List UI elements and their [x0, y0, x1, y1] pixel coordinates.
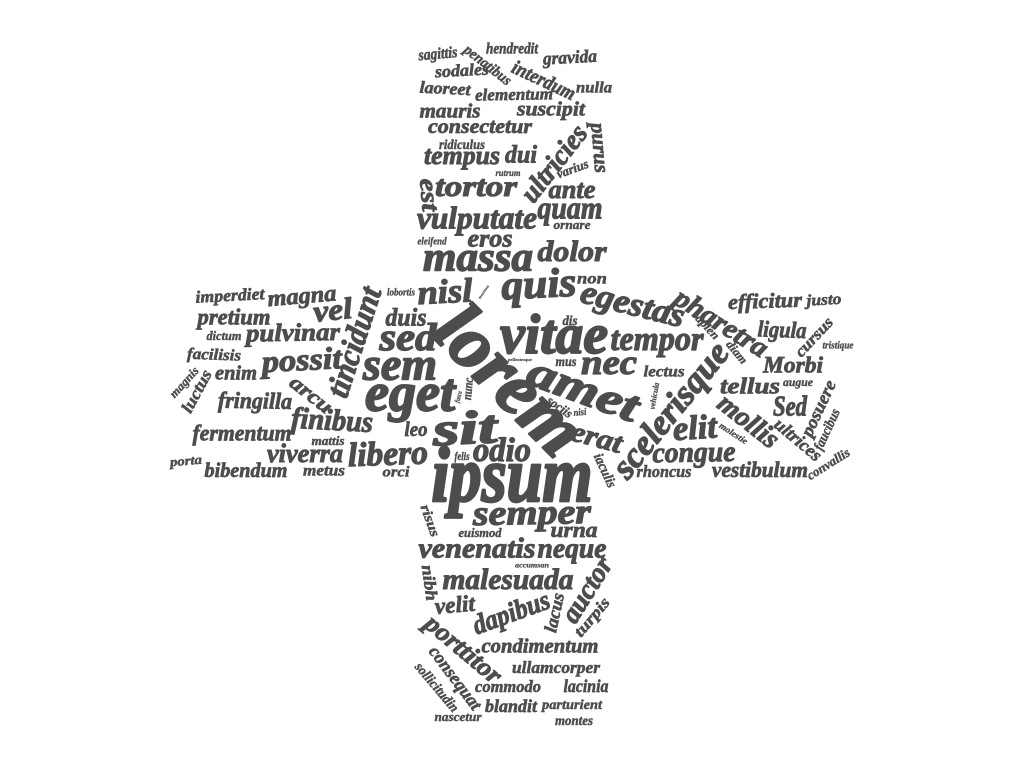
- panel: right arm of the cross: mollis: [711, 388, 785, 455]
- panel: right arm of the cross: augue: [783, 375, 814, 389]
- word: ipsum: ipsum: [432, 431, 592, 518]
- panel: top arm of the cross: gravida: [541, 46, 597, 69]
- panel: top arm of the cross: varius: [554, 156, 591, 181]
- panel: top arm of the cross: interdum: [508, 56, 579, 105]
- panel: bottom arm of the cross: blandit: [485, 696, 538, 716]
- panel: top arm of the cross: quam: [538, 189, 602, 225]
- panel: left arm of the cross: tincidunt: [319, 281, 389, 402]
- panel: left arm of the cross: magnis: [166, 363, 202, 401]
- panel: centre of the cross: non: [577, 271, 607, 288]
- word: amet: amet: [521, 345, 648, 432]
- panel: right arm of the cross: efficitur: [728, 287, 803, 314]
- panel: top arm of the cross: elementum: [475, 84, 553, 105]
- panel: right arm of the cross: egestas: [577, 274, 689, 335]
- panel: bottom arm of the cross: lacinia: [564, 676, 608, 696]
- panel: left arm of the cross: imperdiet: [195, 284, 266, 307]
- panel: right arm of the cross: vehicula: [648, 382, 661, 410]
- panel: left arm of the cross: dictum: [206, 328, 242, 343]
- panel: right arm of the cross: [577, 274, 854, 487]
- panel: right arm of the cross: diam: [723, 338, 751, 367]
- panel: right arm of the cross: tellus: [720, 373, 780, 398]
- panel: centre of the cross: erat: [567, 416, 627, 460]
- panel: bottom arm of the cross: lacus: [540, 591, 568, 634]
- panel: right arm of the cross: posuere: [796, 377, 840, 441]
- word: sit: sit: [430, 401, 501, 457]
- panel: right arm of the cross: ultrices: [770, 414, 826, 465]
- panel: bottom arm of the cross: commodo: [475, 677, 541, 696]
- panel: left arm of the cross: arcu: [285, 370, 338, 419]
- panel: bottom arm of the cross: consequat: [425, 642, 487, 715]
- panel: top arm of the cross: [414, 41, 614, 279]
- panel: right arm of the cross: justo: [803, 291, 842, 310]
- panel: centre of the cross: sed: [378, 316, 437, 359]
- word: massa: massa: [423, 233, 533, 279]
- panel: left arm of the cross: pretium: [196, 304, 271, 329]
- panel: right arm of the cross: ligula: [757, 316, 807, 343]
- panel: right arm of the cross: cursus: [792, 314, 837, 361]
- panel: top arm of the cross: rutrum: [496, 168, 520, 178]
- panel: left arm of the cross: pulvinar: [244, 319, 340, 348]
- panel: top arm of the cross: dui: [505, 142, 537, 169]
- panel: top arm of the cross: eros: [468, 226, 512, 253]
- panel: bottom arm of the cross: parturient: [541, 698, 603, 713]
- panel: centre of the cross: libero: [347, 434, 429, 474]
- panel: bottom arm of the cross: porttitor: [417, 607, 509, 690]
- panel: right arm of the cross: rhoncus: [636, 462, 692, 481]
- panel: left arm of the cross: [166, 280, 389, 482]
- panel: bottom arm of the cross: malesuada: [442, 563, 574, 596]
- panel: bottom arm of the cross: neque: [538, 533, 607, 565]
- panel: centre of the cross: orci: [382, 464, 410, 480]
- panel: left arm of the cross: fringilla: [218, 388, 292, 414]
- panel: bottom arm of the cross: nascetur: [435, 709, 482, 724]
- panel: centre of the cross: odio: [473, 432, 531, 469]
- panel: left arm of the cross: finibus: [290, 402, 374, 439]
- panel: right arm of the cross: vestibulum: [712, 457, 808, 482]
- panel: top arm of the cross: eleifend: [418, 236, 447, 247]
- panel: bottom arm of the cross: montes: [555, 714, 594, 729]
- panel: right arm of the cross: sapien: [688, 307, 723, 343]
- panel: bottom arm of the cross: turpis: [571, 594, 614, 641]
- panel: left arm of the cross: facilisis: [187, 346, 241, 365]
- panel: right arm of the cross: convallis: [804, 445, 853, 483]
- panel: bottom arm of the cross: accumsan: [515, 562, 549, 570]
- panel: top arm of the cross: tortor: [435, 170, 517, 203]
- panel: top arm of the cross: suscipit: [516, 99, 587, 121]
- panel: left arm of the cross: bibendum: [204, 458, 288, 482]
- panel: top arm of the cross: sodales: [433, 59, 490, 81]
- panel: left arm of the cross: enim: [215, 363, 257, 385]
- panel: bottom arm of the cross: sollicitudin: [411, 659, 461, 716]
- panel: centre of the cross: leo: [404, 417, 428, 441]
- panel: centre of the cross: mus: [556, 355, 577, 370]
- panel: top arm of the cross: vulputate: [417, 199, 537, 235]
- word: vitae: vitae: [500, 304, 608, 366]
- panel: right arm of the cross: Morbi: [762, 352, 824, 377]
- panel: centre of the cross: nisl: [416, 272, 474, 312]
- panel: top arm of the cross: nulla: [576, 80, 612, 97]
- panel: centre of the cross: nec: [581, 343, 638, 382]
- panel: left arm of the cross: viverra: [267, 439, 343, 468]
- panel: bottom arm of the cross: auctor: [555, 550, 620, 629]
- panel: centre of the cross: maximus: [477, 283, 490, 300]
- panel: top arm of the cross: est: [414, 177, 444, 214]
- word: quis: quis: [500, 258, 577, 308]
- panel: right arm of the cross: pharetra: [667, 281, 774, 364]
- panel: left arm of the cross: metus: [303, 463, 345, 480]
- panel: centre of the cross: lobortis: [387, 287, 415, 298]
- panel: centre of the cross: felis: [454, 449, 470, 463]
- panel: centre of the cross: nunc: [459, 377, 476, 400]
- panel: bottom arm of the cross: condimentum: [481, 636, 599, 658]
- panel: centre of the cross: sociis: [543, 392, 576, 421]
- panel: top arm of the cross: mauris: [420, 101, 481, 123]
- panel: centre of the cross: pellentesque: [507, 357, 532, 362]
- panel: top arm of the cross: sagittis: [417, 44, 458, 64]
- panel: left arm of the cross: luctus: [177, 366, 216, 416]
- panel: right arm of the cross: tristique: [822, 340, 854, 351]
- word: scelerisque: scelerisque: [603, 334, 737, 487]
- panel: top arm of the cross: tempus: [424, 141, 500, 170]
- panel: bottom arm of the cross: nibh: [418, 564, 441, 602]
- panel: centre of the cross: duis: [386, 305, 426, 332]
- panel: centre of the cross: iaculis: [590, 451, 619, 491]
- panel: top arm of the cross: ridiculus: [439, 138, 485, 153]
- panel: right arm of the cross: Sed: [773, 391, 808, 422]
- panel: right arm of the cross: lectus: [644, 364, 684, 381]
- panel: centre of the cross: nisi: [573, 407, 587, 419]
- panel: top arm of the cross: ornare: [554, 217, 591, 232]
- panel: left arm of the cross: possit: [258, 340, 344, 379]
- panel: top arm of the cross: ultricies: [514, 119, 594, 209]
- panel: top arm of the cross: dolor: [538, 235, 607, 268]
- panel: bottom arm of the cross: [411, 492, 620, 729]
- panel: bottom arm of the cross: venenatis: [419, 533, 535, 565]
- panel: centre of the cross: dis: [562, 314, 578, 329]
- panel: bottom arm of the cross: urna: [550, 517, 598, 542]
- panel: left arm of the cross: fermentum: [192, 420, 292, 445]
- panel: bottom arm of the cross: dapibus: [468, 585, 554, 641]
- panel: top arm of the cross: ante: [549, 175, 595, 204]
- panel: top arm of the cross: laoreet: [419, 78, 472, 99]
- panel: top arm of the cross: purus: [586, 120, 614, 174]
- panel: right arm of the cross: elit: [672, 408, 720, 448]
- panel: bottom arm of the cross: semper: [471, 492, 592, 533]
- panel: left arm of the cross: mattis: [312, 433, 344, 448]
- panel: bottom arm of the cross: euismod: [458, 525, 502, 540]
- panel: left arm of the cross: porta: [168, 452, 203, 469]
- panel: right arm of the cross: faucibus: [812, 406, 844, 453]
- panel: top arm of the cross: penatibus: [459, 41, 514, 89]
- panel: right arm of the cross: molestie: [717, 420, 750, 446]
- word: lorem: lorem: [418, 287, 603, 472]
- panel: top arm of the cross: hendredit: [486, 41, 538, 58]
- panel: bottom arm of the cross: velit: [434, 591, 476, 619]
- panel: centre of the cross: fusce: [453, 390, 464, 404]
- panel: bottom arm of the cross: risus: [417, 503, 442, 540]
- word: eget: eget: [365, 362, 457, 422]
- panel: right arm of the cross: congue: [652, 436, 736, 469]
- panel: centre of the cross: [347, 258, 648, 518]
- panel: left arm of the cross: vel: [312, 292, 355, 329]
- panel: right arm of the cross: tempor: [610, 321, 704, 358]
- panel: bottom arm of the cross: ullamcorper: [512, 658, 600, 677]
- panel: left arm of the cross: magna: [266, 280, 337, 311]
- panel: top arm of the cross: consectetur: [428, 114, 533, 138]
- word: sem: sem: [362, 339, 437, 389]
